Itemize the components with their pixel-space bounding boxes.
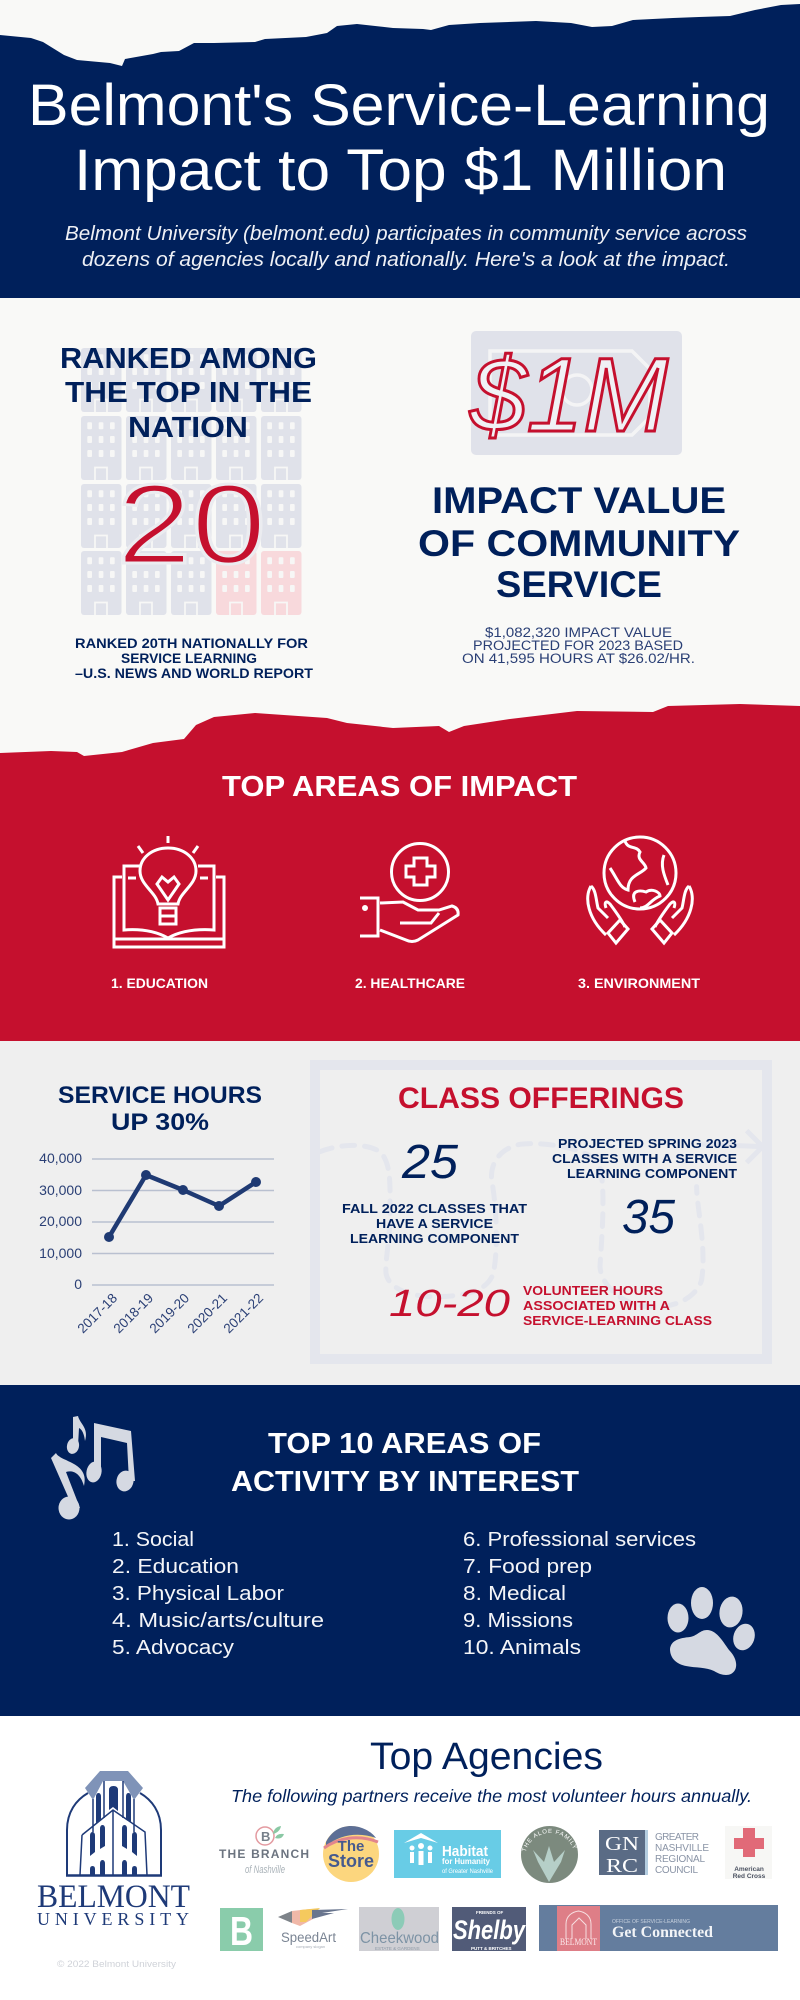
line chart: 2021-22 xyxy=(220,1291,266,1336)
stat: 25 fall classes: 25 xyxy=(401,1136,458,1189)
panel: impact value xyxy=(418,331,740,666)
intro text: Belmont University (belmont.edu) participates in community service across xyxy=(65,222,747,245)
caption: impact calculation xyxy=(462,625,695,666)
caption: impact calculation: $1,082,320 IMPACT VALUE xyxy=(485,625,672,640)
list: areas 1 to 5: 1. Social xyxy=(112,1529,194,1551)
stat: 10-20 volunteer hours xyxy=(389,1283,712,1328)
labels: top three areas: 1. EDUCATION xyxy=(111,975,208,991)
labels: top three areas: 2. HEALTHCARE xyxy=(355,975,465,991)
logo: Habitat for Humanity: Habitat xyxy=(442,1843,488,1860)
panel: service hours xyxy=(39,1082,274,1336)
heading xyxy=(58,1082,262,1136)
panel: top 10 areas of activity xyxy=(0,1385,800,1716)
caption: ranking source: RANKED 20TH NATIONALLY FOR xyxy=(75,636,308,651)
icon: healthcare xyxy=(360,844,458,942)
logo: American Red Cross: American xyxy=(734,1866,764,1873)
stat: 25 fall classes: HAVE A SERVICE xyxy=(376,1216,493,1231)
heading: ranked among the top: RANKED AMONG xyxy=(60,343,317,375)
line chart: 2018-19 xyxy=(110,1291,156,1336)
list: areas 6 to 10: 6. Professional services xyxy=(463,1529,696,1551)
number: 20: 20 xyxy=(117,461,266,587)
icon: environment xyxy=(588,837,692,943)
tower drawing xyxy=(66,1771,162,1876)
logo: Greater Nashville Regional Council: GREATER xyxy=(655,1832,699,1843)
heading: impact value of community service: SERVICE xyxy=(496,564,662,605)
heading: ACTIVITY BY INTEREST xyxy=(231,1466,579,1498)
stat: 35 spring classes: 35 xyxy=(622,1191,675,1244)
logo: Friends of Shelby: PUTT & BRITCHES xyxy=(471,1946,512,1951)
labels: top three areas: 3. ENVIRONMENT xyxy=(578,975,700,991)
logo: Cheekwood: Cheekwood xyxy=(360,1930,439,1947)
caption: ranking source: SERVICE LEARNING xyxy=(121,651,257,666)
wordmark: UNIVERSITY xyxy=(37,1909,189,1929)
stat: 10-20 volunteer hours: SERVICE-LEARNING CLASS xyxy=(523,1313,712,1328)
list: areas 1 to 5: 4. Music/arts/culture xyxy=(112,1610,324,1632)
list: areas 6 to 10: 9. Missions xyxy=(463,1610,573,1632)
stat: 35 spring classes: PROJECTED SPRING 2023 xyxy=(558,1136,737,1151)
heading: impact value of community service: OF COMMUNITY xyxy=(418,523,740,564)
logo: Get Connected: BELMONT xyxy=(560,1937,597,1947)
number: $1M: $1M xyxy=(469,337,669,454)
line chart: 10,000 xyxy=(39,1245,82,1261)
line chart: 2017-18 xyxy=(74,1291,120,1336)
icon: dollar bill xyxy=(471,331,682,455)
logo: The Store: Store xyxy=(328,1851,374,1871)
panel: footer xyxy=(0,1716,800,2000)
text: agencies intro: The following partners receive the most volunteer hours annually. xyxy=(231,1786,752,1806)
intro text xyxy=(65,222,747,271)
heading: impact value of community service: IMPACT VALUE xyxy=(432,480,726,521)
caption: ranking source xyxy=(75,636,314,681)
stat: 35 spring classes: LEARNING COMPONENT xyxy=(567,1166,737,1181)
logo: The Aloe Family: THE ALOE FAMILY xyxy=(522,1828,577,1851)
logo: Habitat for Humanity xyxy=(394,1830,501,1878)
labels: top three areas xyxy=(111,975,700,991)
logo: Habitat for Humanity: of Greater Nashville xyxy=(442,1868,493,1875)
icon: education xyxy=(114,836,224,947)
panel: top areas of impact xyxy=(0,704,800,1041)
icon: music notes xyxy=(51,1416,135,1520)
logo: Cheekwood: ESTATE & GARDENS xyxy=(375,1946,420,1951)
logo: Greater Nashville Regional Council: COUNCIL xyxy=(655,1865,698,1876)
logo: The Branch: of Nashville xyxy=(245,1864,285,1876)
logo: The Branch: B xyxy=(261,1829,270,1844)
stat: 10-20 volunteer hours: 10-20 xyxy=(389,1283,510,1325)
heading xyxy=(231,1428,579,1498)
list: areas 6 to 10: 7. Food prep xyxy=(463,1556,592,1578)
list: areas 1 to 5: 3. Physical Labor xyxy=(112,1583,284,1605)
copyright: © 2022 Belmont University xyxy=(57,1959,176,1970)
logo: The Branch: THE BRANCH xyxy=(219,1847,309,1861)
logo: Friends of Shelby: Shelby xyxy=(453,1915,527,1945)
title xyxy=(28,73,770,203)
stat: 25 fall classes xyxy=(342,1136,527,1246)
line chart xyxy=(39,1150,274,1336)
logo: Friends of Shelby xyxy=(452,1907,527,1951)
logo: SpeedArt: SpeedArt xyxy=(281,1930,336,1945)
stat: 10-20 volunteer hours: VOLUNTEER HOURS xyxy=(523,1283,663,1298)
logo: Habitat for Humanity: for Humanity xyxy=(442,1857,491,1866)
caption: ranking source: –U.S. NEWS AND WORLD REPORT xyxy=(75,666,314,681)
heading: CLASS OFFERINGS xyxy=(398,1082,684,1115)
heading: TOP AREAS OF IMPACT xyxy=(222,771,577,803)
stat: 25 fall classes: FALL 2022 CLASSES THAT xyxy=(342,1201,527,1216)
title: Impact to Top $1 Million xyxy=(74,138,727,203)
panel: hours and classes background xyxy=(0,1041,800,1385)
logo: Greater Nashville Regional Council: RC xyxy=(606,1855,638,1877)
logo: Greater Nashville Regional Council xyxy=(599,1830,709,1877)
heading: ranked among the top: THE TOP IN THE xyxy=(65,377,312,409)
heading: impact value of community service xyxy=(418,480,740,605)
logo: The Store: The xyxy=(338,1838,364,1855)
heading: SERVICE HOURS xyxy=(58,1082,262,1109)
stat: 25 fall classes: LEARNING COMPONENT xyxy=(350,1231,519,1246)
logo: SpeedArt xyxy=(278,1908,348,1949)
list: areas 6 to 10: 10. Animals xyxy=(463,1637,581,1659)
logo: Greater Nashville Regional Council: NASHVILLE xyxy=(655,1843,709,1854)
caption: impact calculation: ON 41,595 HOURS AT $26.02/HR. xyxy=(462,651,695,666)
list: areas 6 to 10 xyxy=(463,1529,696,1659)
stat: 10-20 volunteer hours: ASSOCIATED WITH A xyxy=(523,1298,671,1313)
stat: 35 spring classes xyxy=(552,1136,737,1244)
logo: The Aloe Family xyxy=(521,1826,578,1883)
stat: 35 spring classes: CLASSES WITH A SERVICE xyxy=(552,1151,737,1166)
heading: UP 30% xyxy=(111,1109,209,1136)
logo: American Red Cross xyxy=(725,1826,772,1880)
logo: Get Connected: OFFICE OF SERVICE-LEARNING xyxy=(612,1919,690,1925)
wordmark: BELMONT xyxy=(37,1879,190,1915)
line chart: 2019-20 xyxy=(146,1291,192,1336)
list: areas 6 to 10: 8. Medical xyxy=(463,1583,566,1605)
logo: B: B xyxy=(230,1908,253,1954)
line chart: 2020-21 xyxy=(184,1291,230,1336)
icon: grid of buildings xyxy=(81,348,302,615)
title: Belmont's Service-Learning xyxy=(28,73,770,138)
logo: Belmont University xyxy=(37,1771,190,1929)
logo: Greater Nashville Regional Council: REGIONAL xyxy=(655,1854,705,1865)
line chart: 20,000 xyxy=(39,1213,82,1229)
panel: class offerings xyxy=(315,1065,767,1359)
logo: Greater Nashville Regional Council: GN xyxy=(605,1833,639,1855)
heading: ranked among the top xyxy=(60,343,317,444)
logo: American Red Cross: Red Cross xyxy=(733,1873,766,1880)
logo: The Branch xyxy=(219,1826,309,1876)
line chart: 30,000 xyxy=(39,1182,82,1198)
intro text: dozens of agencies locally and nationally. Here's a look at the impact. xyxy=(82,248,730,271)
icon: paw print xyxy=(668,1587,758,1675)
logo: Friends of Shelby: FRIENDS OF xyxy=(476,1910,504,1915)
line chart: 40,000 xyxy=(39,1150,82,1166)
logo: The Store xyxy=(323,1826,379,1882)
logo: B xyxy=(220,1908,263,1954)
panel: header xyxy=(0,4,800,298)
logo: SpeedArt: company slogan xyxy=(296,1944,325,1949)
panel: national ranking xyxy=(60,343,317,681)
heading: TOP 10 AREAS OF xyxy=(268,1428,541,1460)
logo: Cheekwood xyxy=(359,1907,439,1951)
caption: impact calculation: PROJECTED FOR 2023 BASED xyxy=(473,638,683,653)
heading: top agencies: Top Agencies xyxy=(370,1736,603,1778)
line chart: 0 xyxy=(74,1276,82,1292)
list: areas 1 to 5: 2. Education xyxy=(112,1556,239,1578)
wordmark xyxy=(37,1879,190,1929)
list: areas 1 to 5 xyxy=(112,1529,324,1659)
heading: ranked among the top: NATION xyxy=(128,412,248,444)
list: areas 1 to 5: 5. Advocacy xyxy=(112,1637,234,1659)
logo: Get Connected: Get Connected xyxy=(612,1924,713,1941)
logo: Get Connected xyxy=(539,1905,778,1951)
